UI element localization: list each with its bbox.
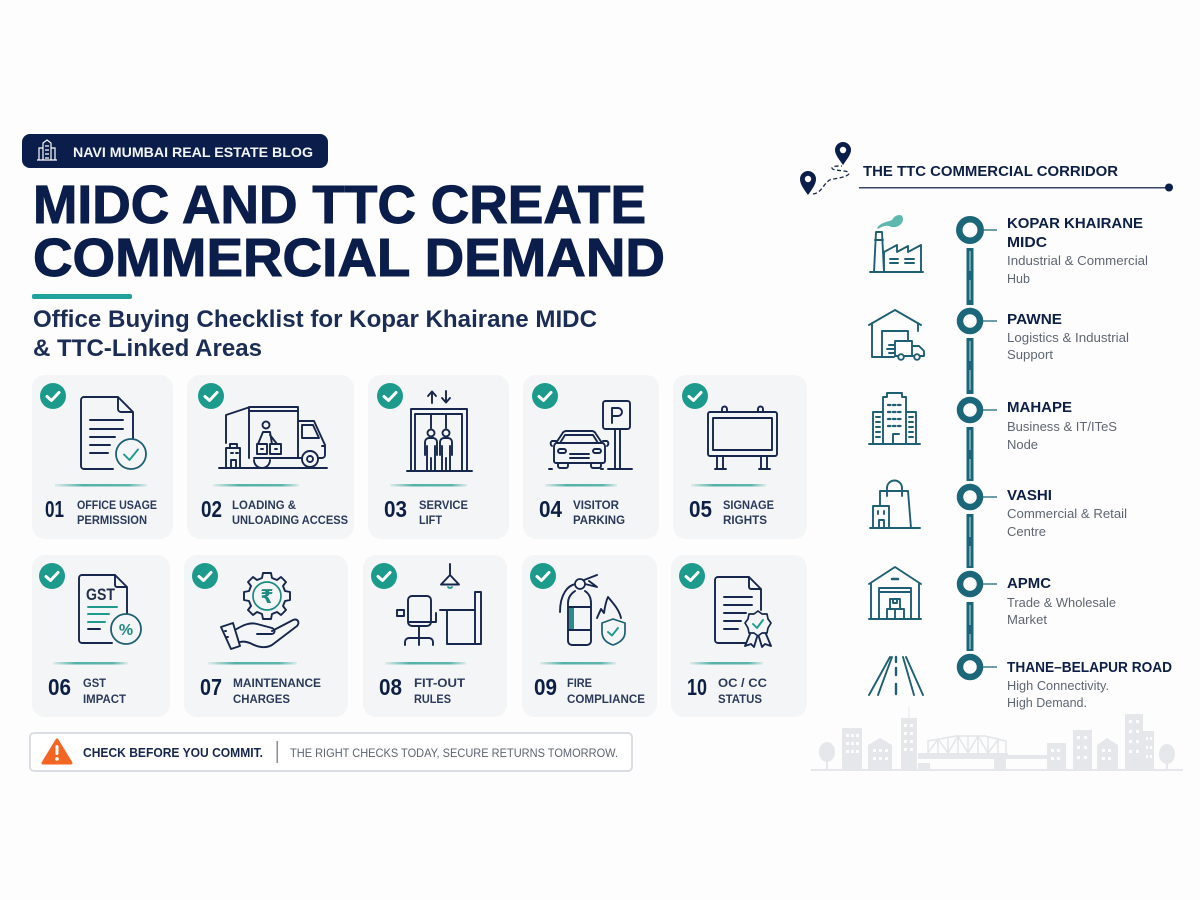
badge label: NAVI MUMBAI REAL ESTATE BLOG — [73, 144, 313, 160]
icon: shopping bag and shop — [870, 481, 920, 528]
number: 08 — [379, 674, 402, 700]
check badge — [682, 383, 708, 409]
stop text: Hub — [1007, 271, 1030, 286]
stop text: Business & IT/ITeS — [1007, 419, 1117, 434]
label: CHARGES — [233, 692, 290, 706]
title — [33, 175, 665, 288]
stop text — [1007, 215, 1148, 286]
stop text: Logistics & Industrial — [1007, 330, 1129, 345]
label — [723, 498, 774, 527]
icon: fire extinguisher, flame and shield — [560, 575, 625, 645]
title: MIDC AND TTC CREATE — [33, 175, 646, 235]
blog badge — [22, 134, 328, 168]
stop text: PAWNE — [1007, 311, 1062, 328]
stop: APMC — [869, 567, 1116, 627]
title accent bar — [32, 294, 132, 299]
label: IMPACT — [83, 692, 127, 706]
stop: Kopar Khairane MIDC — [870, 215, 1148, 286]
label: LIFT — [419, 513, 443, 527]
subtitle — [33, 306, 597, 362]
icon: lift with people — [407, 391, 472, 471]
callout: check before you commit — [30, 733, 632, 771]
check badge — [371, 563, 397, 589]
check badge — [377, 383, 403, 409]
icon: office desk and chair — [397, 564, 481, 645]
icon: warehouse with truck — [869, 310, 924, 360]
icon: office towers — [869, 393, 920, 444]
stop: Mahape — [869, 393, 1117, 452]
number: 02 — [201, 496, 222, 522]
number: 06 — [48, 674, 71, 700]
check badge — [198, 383, 224, 409]
number: 01 — [45, 496, 64, 522]
label: FIRE — [567, 676, 592, 690]
stop text: Node — [1007, 437, 1038, 452]
corridor timeline — [959, 219, 997, 677]
number: 05 — [689, 496, 712, 522]
icon: map pins with dashed route — [800, 142, 851, 195]
stop text: High Demand. — [1007, 695, 1087, 710]
stop text: Support — [1007, 347, 1053, 362]
check badge — [40, 383, 66, 409]
card 07: maintenance charges — [184, 555, 348, 717]
card 02: loading and unloading access — [187, 375, 354, 539]
label: OFFICE USAGE — [77, 498, 157, 512]
label — [83, 676, 127, 706]
card 09: fire compliance — [522, 555, 657, 717]
card 04: visitor parking — [523, 375, 659, 539]
label — [77, 498, 157, 527]
icon: GST document — [79, 575, 141, 644]
stop: Pawne — [869, 310, 1129, 362]
stop text: KOPAR KHAIRANE — [1007, 215, 1143, 232]
stop text: Market — [1007, 612, 1047, 627]
check badge — [39, 563, 65, 589]
card 01: office usage permission — [32, 375, 173, 539]
label — [232, 498, 348, 527]
stop text — [1007, 575, 1116, 627]
check badge — [530, 563, 556, 589]
stop text: Commercial & Retail — [1007, 506, 1127, 521]
icon: GST document: % — [119, 622, 133, 639]
stop text — [1007, 487, 1127, 539]
stop text: MAHAPE — [1007, 399, 1072, 416]
icon: factory — [870, 215, 923, 272]
callout heading: CHECK BEFORE YOU COMMIT. — [83, 746, 263, 760]
icon: road — [869, 657, 923, 695]
label: GST — [83, 676, 107, 690]
number: 07 — [200, 674, 222, 700]
label: SERVICE — [419, 498, 468, 512]
icon: office buildings — [37, 140, 57, 160]
stop text: MIDC — [1007, 234, 1047, 251]
number: 03 — [384, 496, 407, 522]
stop text — [1007, 659, 1172, 710]
label — [567, 676, 645, 706]
icon: GST document: GST — [86, 585, 116, 604]
stop text: THANE–BELAPUR ROAD — [1007, 659, 1172, 676]
label — [718, 676, 767, 706]
stop text — [1007, 399, 1117, 452]
label: VISITOR — [573, 498, 619, 512]
label: PARKING — [573, 513, 625, 527]
label: STATUS — [718, 692, 762, 706]
check badge — [679, 563, 705, 589]
stop text: High Connectivity. — [1007, 678, 1109, 693]
stop text — [1007, 311, 1129, 362]
corridor heading: THE TTC COMMERCIAL CORRIDOR — [863, 164, 1119, 180]
title: COMMERCIAL DEMAND — [33, 228, 665, 288]
card 03: service lift — [368, 375, 509, 539]
icon: certificate document — [715, 577, 771, 647]
label: UNLOADING ACCESS — [232, 513, 348, 527]
icon: car and parking sign — [549, 401, 632, 469]
label — [414, 676, 466, 706]
subtitle: Office Buying Checklist for Kopar Khairane MIDC — [33, 306, 597, 333]
label: LOADING & — [232, 498, 296, 512]
card 10: OC / CC status — [671, 555, 807, 717]
icon: delivery truck — [219, 407, 327, 468]
skyline illustration — [811, 707, 1183, 771]
label: SIGNAGE — [723, 498, 774, 512]
subtitle: & TTC-Linked Areas — [33, 335, 262, 362]
label: COMPLIANCE — [567, 692, 645, 706]
label: MAINTENANCE — [233, 676, 321, 690]
stop text: APMC — [1007, 575, 1051, 592]
label: FIT-OUT — [414, 676, 466, 690]
check badge — [192, 563, 218, 589]
label: RIGHTS — [723, 513, 767, 527]
label: PERMISSION — [77, 513, 147, 527]
icon: wholesale warehouse — [869, 567, 921, 619]
callout message: THE RIGHT CHECKS TODAY, SECURE RETURNS TOMORROW. — [290, 746, 618, 760]
stop text: VASHI — [1007, 487, 1052, 504]
stop text: Trade & Wholesale — [1007, 595, 1116, 610]
stop text: Centre — [1007, 524, 1046, 539]
corridor header — [800, 142, 1173, 195]
card 08: fit-out rules — [363, 555, 507, 717]
card 05: signage rights — [673, 375, 807, 539]
icon: gear, rupee and hand — [221, 573, 298, 649]
number: 10 — [687, 674, 707, 700]
number: 04 — [539, 496, 562, 522]
label: OC / CC — [718, 676, 767, 690]
label — [419, 498, 468, 527]
check badge — [532, 383, 558, 409]
label: RULES — [414, 692, 451, 706]
stop text: Industrial & Commercial — [1007, 253, 1148, 268]
stop: Thane-Belapur Road — [869, 657, 1172, 710]
icon: warning triangle — [43, 740, 71, 763]
label — [233, 676, 321, 706]
stop: Vashi — [870, 481, 1127, 539]
icon: gear, rupee and hand: ₹ — [260, 586, 274, 608]
label — [573, 498, 625, 527]
icon: billboard — [708, 406, 777, 469]
number: 09 — [534, 674, 557, 700]
card 06: GST impact — [32, 555, 170, 717]
icon: document with check — [81, 397, 146, 469]
